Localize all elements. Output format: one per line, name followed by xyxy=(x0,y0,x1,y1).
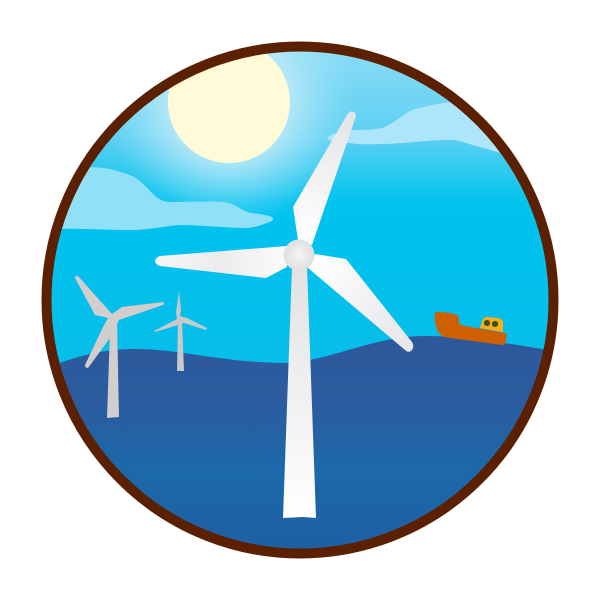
blade: right xyxy=(308,254,413,352)
blades xyxy=(154,291,207,332)
blades xyxy=(75,276,164,368)
sea xyxy=(60,336,544,548)
cabin xyxy=(480,317,503,332)
blade: left xyxy=(155,246,287,278)
cloud: left xyxy=(50,167,273,230)
large turbine xyxy=(155,111,413,518)
hub xyxy=(284,240,314,270)
blade: up xyxy=(293,111,356,245)
tower xyxy=(177,320,184,371)
tower xyxy=(283,266,316,518)
cloud: right xyxy=(327,102,510,156)
small turbine: left xyxy=(75,276,164,418)
badge scene xyxy=(52,52,548,548)
sun xyxy=(168,54,290,163)
hull xyxy=(435,312,507,345)
ship xyxy=(435,312,507,345)
sky xyxy=(52,52,548,364)
ring border xyxy=(46,46,554,554)
small turbine: right xyxy=(154,291,207,371)
tower xyxy=(107,320,119,418)
portholes xyxy=(484,320,498,327)
infographic: offshore wind farm badge xyxy=(42,42,558,558)
sun glow xyxy=(118,52,343,216)
